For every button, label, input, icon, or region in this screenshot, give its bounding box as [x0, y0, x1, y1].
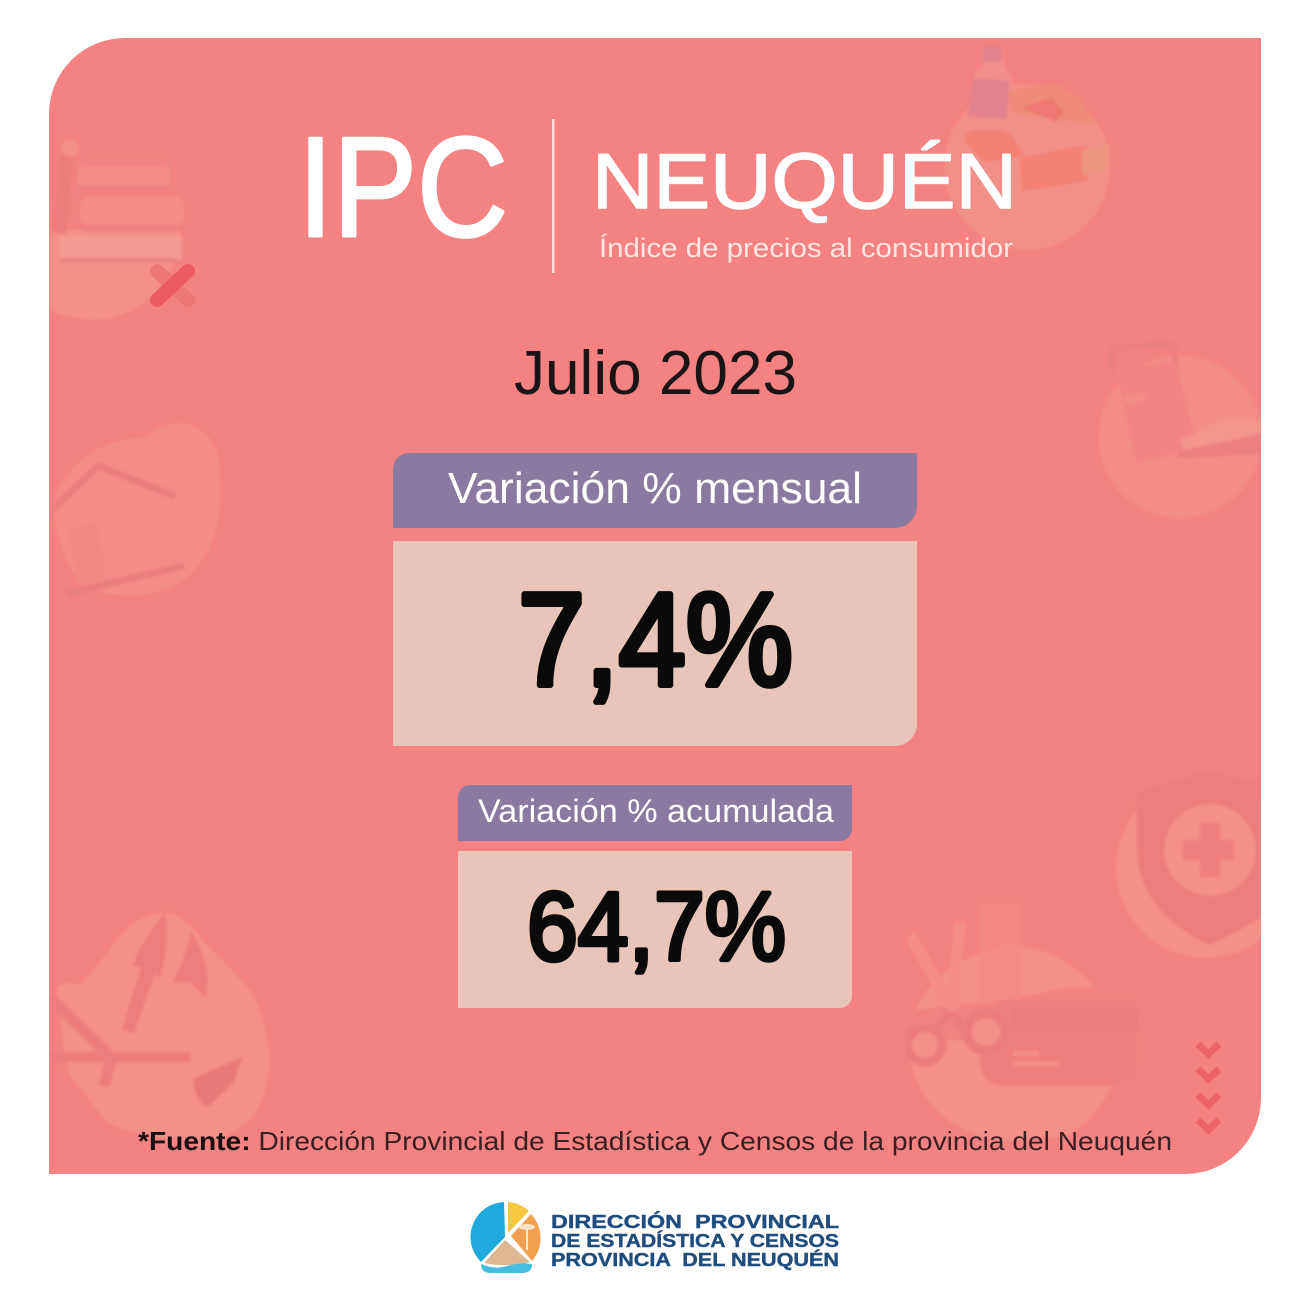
background icons: [49, 46, 1296, 1142]
panel: monthly variation: [393, 453, 917, 746]
source note: *Fuente: Dirección Provincial de Estadística y Censos de la provincia del Neuquén: [138, 1126, 1172, 1156]
title: IPC: IPC: [298, 108, 508, 267]
logo text: PROVINCIA DEL NEUQUÉN: [551, 1249, 839, 1270]
icon: books and pencil: [49, 139, 184, 320]
logo text: DIRECCIÓN PROVINCIAL: [551, 1211, 839, 1232]
panel: accumulated variation: [458, 785, 852, 1008]
icon: four chevrons: [1198, 1044, 1219, 1130]
date heading: Julio 2023: [514, 339, 797, 408]
icon: red cross mark: [157, 271, 188, 300]
accumulated value: 64,7%: [527, 872, 786, 981]
logo text: [551, 1211, 839, 1270]
monthly value box: [393, 541, 917, 746]
logo: [470, 1202, 839, 1273]
accumulated label text: Variación % acumulada: [478, 793, 834, 829]
accumulated value box: [458, 851, 852, 1008]
icon: scissors, comb and credit card: [907, 903, 1137, 1142]
accumulated label bar: [458, 785, 852, 841]
monthly label text: Variación % mensual: [448, 464, 862, 513]
logo icon: pie chart: [470, 1202, 541, 1273]
logo text: DE ESTADÍSTICA Y CENSOS: [551, 1230, 839, 1251]
icon: food and bottle: [944, 46, 1110, 250]
monthly value: 7,4%: [518, 566, 793, 713]
title: NEUQUÉN: NEUQUÉN: [592, 137, 1017, 225]
icon: shield with cross: [1116, 804, 1261, 958]
icon: broken house: [52, 423, 220, 596]
subtitle: Índice de precios al consumidor: [599, 233, 1013, 263]
title divider: [552, 119, 554, 273]
monthly label bar: [393, 453, 917, 528]
icon: fire with tools: [52, 913, 270, 1140]
icon: suitcase and cards: [1098, 345, 1262, 519]
